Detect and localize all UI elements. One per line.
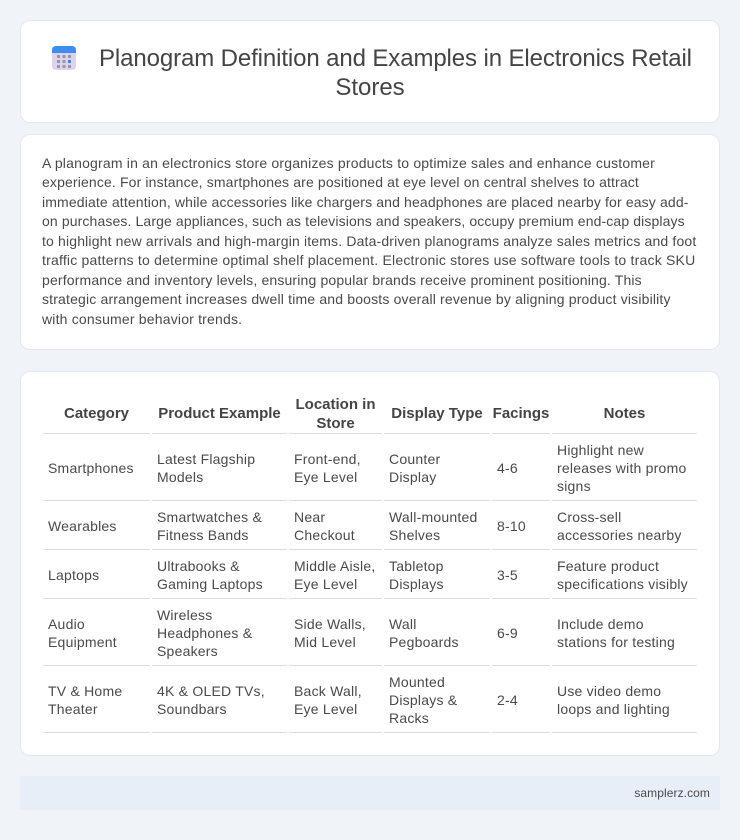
row: smartphones: Highlight new — [557, 442, 644, 458]
row: laptops: Laptops — [48, 567, 99, 583]
row: wearables: Wearables — [48, 518, 117, 534]
header: display type: Display Type — [391, 405, 483, 422]
row: tv and home theater: Back Wall, — [294, 683, 362, 699]
row: wearables: 8-10 — [497, 518, 526, 534]
row: smartphones: 4-6 — [497, 460, 518, 476]
row: tv and home theater: Soundbars — [157, 701, 227, 717]
row: audio equipment: Side Walls, — [294, 616, 366, 632]
panel: description card — [20, 134, 720, 350]
footer text: samplerz.com: samplerz.com — [634, 786, 710, 800]
row: audio equipment: Pegboards — [389, 634, 459, 650]
row: smartphones: Latest Flagship — [157, 451, 255, 467]
text block: description: with consumer behavior trends. — [42, 310, 242, 326]
row: laptops — [48, 558, 688, 592]
row: audio equipment: Wall — [389, 616, 417, 632]
row: tv and home theater — [48, 674, 670, 726]
row: wearables: Cross-sell — [557, 509, 621, 525]
text block: description: experience. For instance, smartphones are positioned at eye level on central shelves to attract — [42, 174, 639, 190]
row: tv and home theater: Displays & — [389, 692, 457, 708]
row: wearables: accessories nearby — [557, 527, 682, 543]
row: audio equipment: Include demo — [557, 616, 644, 632]
title — [99, 45, 692, 101]
row: audio equipment: stations for testing — [557, 634, 675, 650]
header: location in store: Store — [316, 415, 355, 432]
row: wearables: Shelves — [389, 527, 440, 543]
row: tv and home theater: 4K & OLED TVs, — [157, 683, 265, 699]
row: laptops: Eye Level — [294, 576, 357, 592]
row: laptops: Ultrabooks & — [157, 558, 240, 574]
row: smartphones: Smartphones — [48, 460, 134, 476]
row: smartphones: Display — [389, 469, 436, 485]
header: facings: Facings — [493, 405, 549, 422]
row: audio equipment: Wireless — [157, 607, 212, 623]
text block: description: strategic arrangement increases dwell time and boosts overall revenue by aligning product visibility — [42, 291, 671, 307]
row: laptops: Tabletop — [389, 558, 444, 574]
row: laptops: Feature product — [557, 558, 659, 574]
row: laptops: Middle Aisle, — [294, 558, 375, 574]
row: audio equipment: 6-9 — [497, 625, 518, 641]
text block: description: performance and inventory levels, ensuring popular brands receive prominent positioning. This — [42, 272, 642, 288]
row: smartphones: Eye Level — [294, 469, 357, 485]
row: smartphones: Front-end, — [294, 451, 361, 467]
row: wearables: Wall-mounted — [389, 509, 478, 525]
text block: description: on purchases. Large appliances, such as televisions and speakers, occupy premium end-cap displays — [42, 213, 685, 229]
text block: description: traffic patterns to determine optimal shelf placement. Electronic stores use software tools to track SKU — [42, 252, 695, 268]
title: Planogram Definition and Examples in Electronics Retail — [99, 45, 692, 72]
text block: description: A planogram in an electronics store organizes products to optimize sales and enhance customer — [42, 154, 655, 170]
row: wearables: Fitness Bands — [157, 527, 249, 543]
row: audio equipment: Mid Level — [294, 634, 356, 650]
row: wearables: Smartwatches & — [157, 509, 262, 525]
text block: description: to highlight new arrivals and high-margin items. Data-driven planograms analyze sales metrics and foot — [42, 232, 696, 248]
row: laptops: specifications visibly — [557, 576, 688, 592]
table: planogram examples — [43, 396, 697, 733]
header: location in store — [296, 396, 376, 432]
row: audio equipment: Audio — [48, 616, 85, 632]
panel: title card — [20, 20, 720, 123]
row: audio equipment: Headphones & — [157, 625, 252, 641]
header: category: Category — [64, 405, 129, 422]
row: tv and home theater: Theater — [48, 701, 98, 717]
row: tv and home theater: Use video demo — [557, 683, 661, 699]
panel: table card — [20, 371, 720, 756]
row: audio equipment — [48, 607, 675, 659]
row: tv and home theater: loops and lighting — [557, 701, 670, 717]
row: smartphones: Models — [157, 469, 203, 485]
row: smartphones: releases with promo — [557, 460, 686, 476]
row: smartphones: signs — [557, 478, 591, 494]
row: wearables: Near — [294, 509, 325, 525]
row: smartphones — [48, 442, 686, 494]
title: Stores — [335, 74, 405, 101]
row: audio equipment: Equipment — [48, 634, 117, 650]
row: tv and home theater: Racks — [389, 710, 429, 726]
row: wearables: Checkout — [294, 527, 355, 543]
row: smartphones: Counter — [389, 451, 440, 467]
header: location in store: Location in — [296, 396, 376, 413]
row: tv and home theater: TV & Home — [48, 683, 122, 699]
text block: description — [42, 154, 696, 326]
row: laptops: Gaming Laptops — [157, 576, 263, 592]
header: notes: Notes — [604, 405, 645, 422]
row: audio equipment: Speakers — [157, 643, 218, 659]
row: laptops: Displays — [389, 576, 444, 592]
header: product example: Product Example — [158, 405, 281, 422]
row: tv and home theater: 2-4 — [497, 692, 518, 708]
row: laptops: 3-5 — [497, 567, 518, 583]
text block: description: immediate attention, while accessories like chargers and headphones are placed nearby for easy add- — [42, 194, 689, 210]
row: wearables — [48, 509, 682, 543]
row: tv and home theater: Eye Level — [294, 701, 357, 717]
icon: planogram calendar — [52, 46, 76, 70]
row: tv and home theater: Mounted — [389, 674, 445, 690]
footer bar — [20, 776, 720, 810]
